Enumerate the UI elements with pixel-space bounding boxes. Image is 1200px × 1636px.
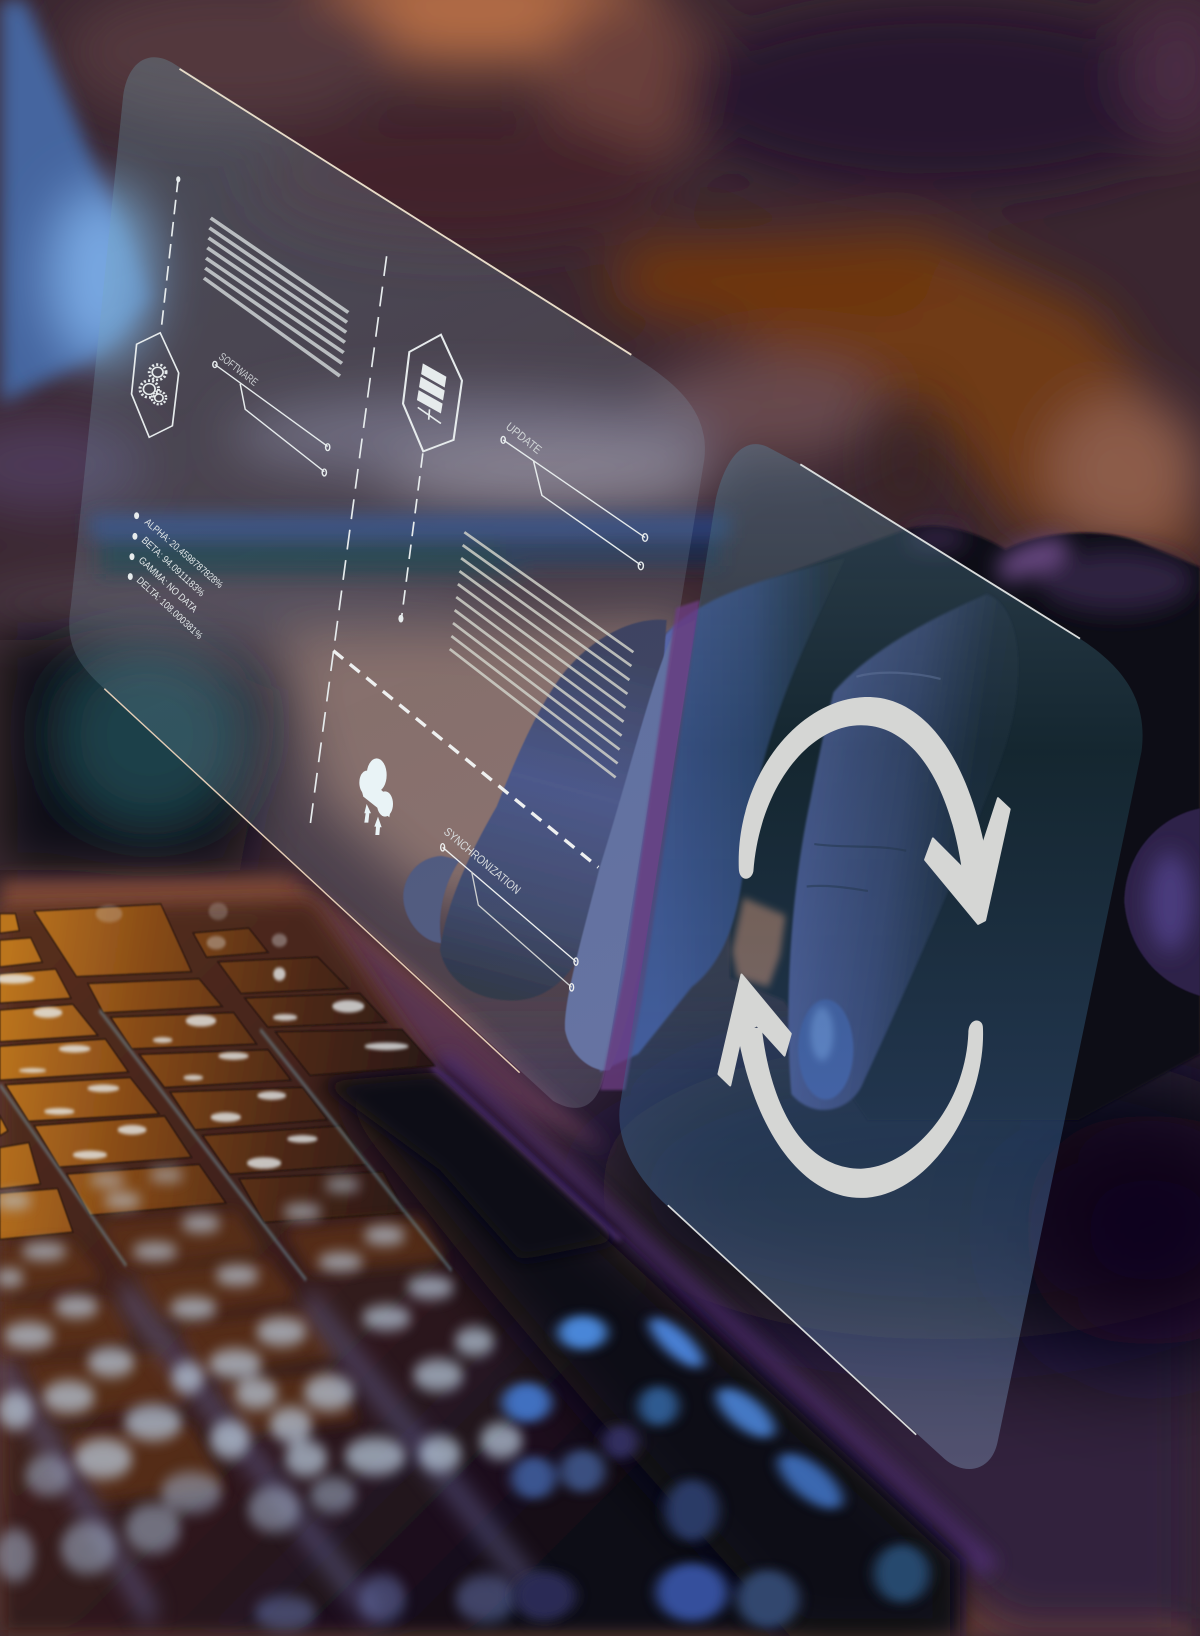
- dashed connector server: [402, 453, 423, 616]
- label: software: SOFTWARE: [216, 351, 260, 389]
- purple gap between panels: [600, 600, 700, 1090]
- icon: lower sync arc: [737, 1021, 983, 1198]
- sync callout lines: [441, 844, 578, 991]
- icon: upper arrowhead: [925, 799, 1009, 924]
- status list: GAMMA: NO DATA: [136, 555, 199, 615]
- blue laptop screen at left: [0, 0, 150, 404]
- keyboard keys in focus: [0, 904, 434, 1239]
- fingers behind data panel: [403, 620, 695, 1070]
- fingernail: [798, 999, 853, 1099]
- icon: upper sync arc: [739, 697, 988, 879]
- icon: server hexagon: [403, 335, 462, 451]
- keyboard gap highlights: [0, 1010, 452, 1280]
- node dot server: [398, 615, 403, 622]
- blurred lower keyboard with key legends: [0, 903, 547, 1630]
- ring finger: [600, 558, 845, 1072]
- dark table zone at left: [0, 640, 270, 870]
- legends sharp: [0, 903, 409, 1169]
- knuckle highlights: [906, 529, 1193, 612]
- status list: BETA: 94.0911183%: [139, 535, 206, 599]
- dashed connector to sync panel: [333, 651, 598, 867]
- finger creases: [807, 673, 941, 891]
- laptop body and hinge: [0, 875, 1200, 1636]
- main vertical dashed divider: [310, 256, 387, 826]
- label: synchronization: SYNCHRONIZATION: [441, 825, 524, 897]
- middle finger: [788, 594, 1018, 1110]
- far right finger: [1124, 808, 1200, 996]
- screen glow: [48, 185, 152, 365]
- second bullet-list lines: [450, 532, 633, 777]
- data panel graphics: upper part: [128, 176, 648, 826]
- soft keys lower rows: [0, 1213, 446, 1502]
- label: update: UPDATE: [503, 419, 545, 457]
- bullet-list lines: [204, 218, 348, 376]
- node dot: [176, 176, 180, 182]
- back of hand: [665, 526, 1200, 1120]
- glass panel: data dashboard: [69, 57, 705, 1108]
- status list: DELTA: 108.000381%: [134, 575, 204, 642]
- icon: cloud with arrows: [359, 758, 393, 835]
- software callout lines: [213, 361, 330, 476]
- update callout lines: [501, 436, 648, 570]
- blue key legends near hinge: [502, 1312, 929, 1628]
- dark object behind right panel: [871, 390, 939, 530]
- glass panel: sync: [619, 444, 1143, 1469]
- table seen between fingers: [732, 898, 786, 987]
- icon: gears hexagon: [132, 333, 179, 437]
- status list: ALPHA: 20.4598787828%: [142, 517, 225, 591]
- index finger: [440, 620, 667, 1000]
- legends soft: [0, 1169, 523, 1479]
- thumb tip: [403, 856, 460, 943]
- dashed connector gear: [161, 178, 178, 331]
- icon: lower arrowhead: [719, 975, 791, 1085]
- data panel graphics: lower part: [333, 651, 598, 991]
- hand resting on laptop: [600, 526, 1200, 1120]
- desk band: [90, 514, 730, 574]
- status list: [134, 517, 225, 642]
- ring finger segment: [565, 620, 695, 1070]
- status bullets: [128, 512, 139, 580]
